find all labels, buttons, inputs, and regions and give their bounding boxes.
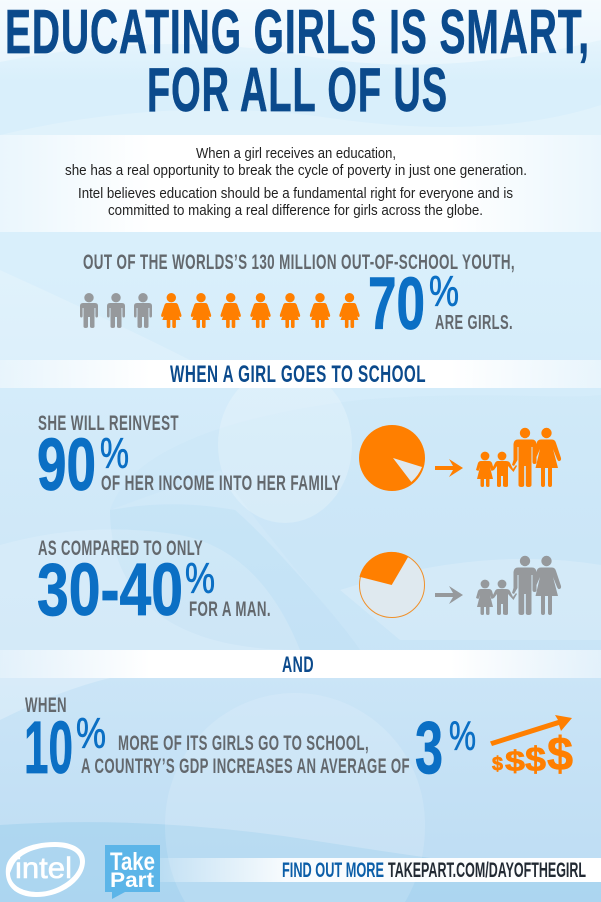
icons: three boys	[80, 293, 152, 328]
logo: intel	[6, 842, 85, 897]
panel: 70 percent statistic	[80, 251, 515, 345]
heading band: and: AND	[282, 652, 314, 677]
panel: woman reinvests 90 percent	[37, 412, 561, 506]
intro text: she has a real opportunity to break the cycle of poverty in just one generation.	[65, 163, 527, 179]
panel: GDP statistic	[24, 694, 573, 789]
intro text: When a girl receives an education,	[196, 146, 396, 162]
10 percent figure: %	[76, 710, 106, 758]
pie chart: 35 percent	[359, 552, 424, 618]
panel: intro	[0, 135, 601, 232]
90 percent figure: %	[100, 430, 129, 478]
arrow: gray	[435, 586, 463, 604]
icon: rising arrow	[490, 715, 572, 746]
logo: take part	[105, 845, 160, 899]
icon: dollar signs: $	[492, 754, 503, 775]
icon: dollar signs: $	[547, 727, 573, 780]
arrow: orange	[435, 459, 463, 477]
icon: orange family	[476, 428, 561, 487]
lead text: AS COMPARED TO ONLY	[38, 537, 203, 560]
3 percent figure: %	[449, 713, 476, 759]
heading band: when a girl goes to school: WHEN A GIRL GOES TO SCHOOL	[170, 361, 426, 388]
logo: intel: intel	[15, 852, 72, 885]
GDP text: MORE OF ITS GIRLS GO TO SCHOOL,	[118, 732, 369, 755]
10 percent figure: 10	[24, 706, 73, 789]
intro text	[65, 146, 527, 219]
icon: dollar signs: $	[505, 746, 525, 778]
heading band: and	[0, 650, 601, 678]
logo: take part: Take	[110, 848, 155, 876]
for a man text: FOR A MAN.	[189, 598, 271, 621]
GDP text	[81, 732, 410, 778]
icon: gray family	[476, 556, 561, 615]
GDP text: A COUNTRY’S GDP INCREASES AN AVERAGE OF	[81, 755, 410, 778]
30-40 percent figure: %	[185, 555, 215, 603]
30-40 percent figure: 30-40	[37, 548, 183, 631]
70 percent figure: 70	[368, 262, 425, 345]
icon: dollar signs: $	[525, 741, 546, 779]
3 percent figure	[415, 706, 476, 789]
when label: WHEN	[25, 694, 67, 717]
icon: dollar signs	[492, 727, 573, 780]
lead text: SHE WILL REINVEST	[38, 412, 179, 435]
icons: seven girls	[161, 293, 360, 328]
title	[5, 0, 590, 125]
intro text: committed to making a real difference for girls across the globe.	[108, 203, 483, 219]
heading band: when a girl goes to school	[0, 360, 601, 388]
90 percent figure: 90	[37, 423, 96, 506]
3 percent figure: 3	[415, 706, 443, 789]
panel: man reinvests 30-40 percent	[37, 537, 561, 631]
footer band: find out more	[150, 858, 601, 882]
pie chart: 90 percent	[359, 425, 425, 491]
are girls label: ARE GIRLS.	[435, 312, 513, 334]
logo: take part: Part	[110, 869, 154, 892]
income text: OF HER INCOME INTO HER FAMILY	[101, 472, 341, 495]
intro text: Intel believes education should be a fundamental right for everyone and is	[78, 186, 513, 202]
footer band: find out more: FIND OUT MORE	[282, 859, 384, 882]
70 percent figure: %	[429, 268, 459, 316]
